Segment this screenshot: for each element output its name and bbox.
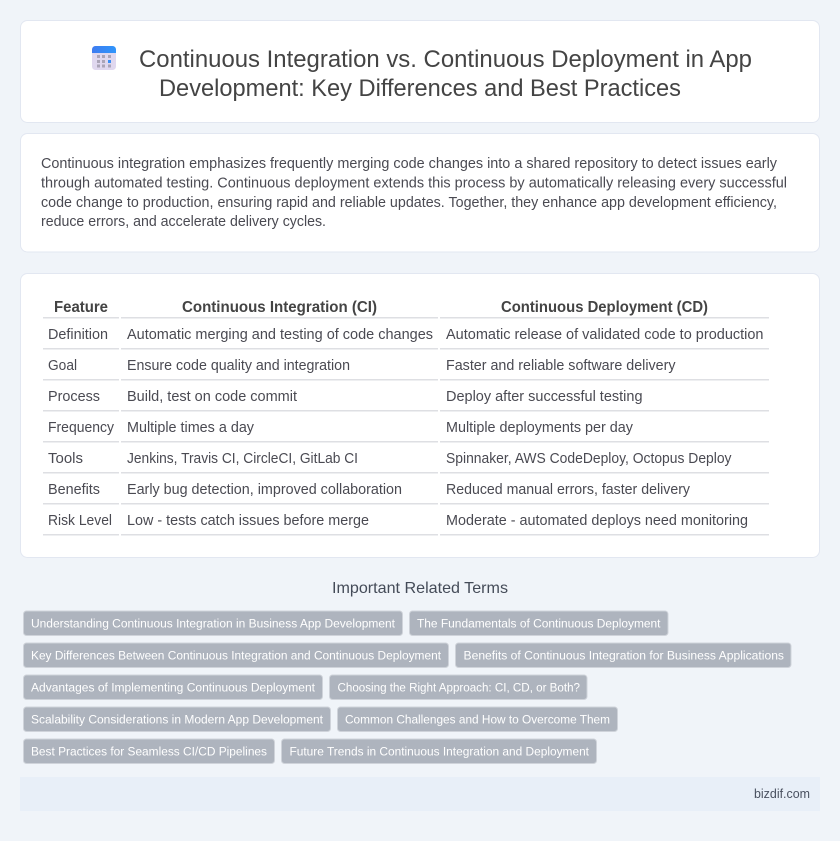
title: Continuous Integration vs. Continuous Deployment in App (139, 46, 752, 73)
panel: introduction (20, 134, 820, 252)
heading: important related terms: Important Related Terms (332, 580, 508, 597)
footer source text: bizdif.com (754, 786, 810, 801)
table row: risk level (43, 513, 769, 536)
tag: scalability: Scalability Considerations in Modern App Development (31, 712, 324, 726)
table row: process: Process (48, 389, 100, 405)
tag: best practices: Best Practices for Seamless CI/CD Pipelines (31, 744, 267, 758)
table row: definition (43, 327, 769, 350)
tag: understanding CI (24, 611, 402, 636)
text block: introduction paragraph: reduce errors, and accelerate delivery cycles. (41, 214, 326, 230)
table row: benefits (43, 482, 769, 504)
tag: choosing the right approach (330, 675, 587, 700)
table header row: Continuous Deployment (CD) (501, 299, 708, 316)
table row: goal: Goal (48, 358, 77, 374)
table row: goal: Ensure code quality and integration (127, 358, 350, 374)
tag: scalability (24, 707, 330, 732)
table row: frequency: Multiple times a day (127, 420, 255, 436)
table header row (43, 299, 769, 318)
text block: introduction paragraph: Continuous integration emphasizes frequently merging code changes into a shared repository to detect issues early (41, 156, 778, 172)
tag: common challenges: Common Challenges and How to Overcome Them (345, 712, 610, 726)
table row: process: Deploy after successful testing (446, 389, 642, 405)
table row: goal: Faster and reliable software delivery (446, 358, 676, 374)
tag: fundamentals of CD: The Fundamentals of Continuous Deployment (417, 616, 661, 630)
tag: benefits of CI: Benefits of Continuous Integration for Business Applications (464, 648, 784, 662)
panel: title header (20, 20, 820, 122)
table row: frequency (43, 420, 769, 442)
table row: process (43, 389, 769, 412)
table row: benefits: Early bug detection, improved collaboration (127, 482, 402, 498)
table row: goal (43, 358, 769, 380)
title (139, 46, 752, 102)
tag: advantages of CD: Advantages of Implementing Continuous Deployment (31, 680, 316, 694)
table row: risk level: Risk Level (48, 513, 112, 529)
table row: definition: Definition (48, 327, 108, 343)
table row: risk level: Low - tests catch issues before merge (127, 513, 369, 529)
tag: fundamentals of CD (410, 611, 668, 636)
title: Development: Key Differences and Best Practices (159, 75, 681, 102)
icon: calendar (92, 46, 116, 70)
text block: introduction paragraph: code change to production, ensuring rapid and reliable updates. Together, they enhance app development efficiency, (41, 195, 777, 211)
footer (20, 777, 820, 811)
tag: choosing the right approach: Choosing the Right Approach: CI, CD, or Both? (338, 680, 580, 694)
tag: key differences (24, 643, 448, 668)
table row: benefits: Benefits (48, 482, 100, 498)
panel: comparison table (20, 274, 820, 558)
tag: key differences: Key Differences Between Continuous Integration and Continuous Deployment (31, 648, 442, 662)
table row: benefits: Reduced manual errors, faster delivery (446, 482, 691, 498)
table header row: Continuous Integration (CI) (182, 299, 377, 316)
tag: future trends: Future Trends in Continuous Integration and Deployment (290, 744, 590, 758)
table row: frequency: Multiple deployments per day (446, 420, 634, 436)
tag: understanding CI: Understanding Continuous Integration in Business App Development (31, 616, 396, 630)
tag: future trends (282, 739, 596, 764)
table row: definition: Automatic merging and testing of code changes (127, 327, 433, 343)
text block: introduction paragraph (41, 156, 787, 230)
table row: risk level: Moderate - automated deploys need monitoring (446, 513, 748, 529)
table row: tools: Spinnaker, AWS CodeDeploy, Octopus Deploy (446, 451, 732, 467)
tag: benefits of CI (456, 643, 791, 668)
table row: tools (43, 451, 769, 474)
table row: tools: Tools (48, 451, 83, 467)
table row: definition: Automatic release of validated code to production (446, 327, 764, 343)
tag: common challenges (338, 707, 618, 732)
table row: tools: Jenkins, Travis CI, CircleCI, GitLab CI (127, 451, 358, 467)
panel: related term tags (24, 611, 791, 764)
text block: introduction paragraph: through automated testing. Continuous deployment extends this process by automatically releasing every successful (41, 176, 787, 192)
table row: process: Build, test on code commit (127, 389, 297, 405)
table header row: Feature (54, 299, 108, 316)
tag: advantages of CD (24, 675, 322, 700)
tag: best practices (24, 739, 274, 764)
table row: frequency: Frequency (48, 420, 115, 436)
